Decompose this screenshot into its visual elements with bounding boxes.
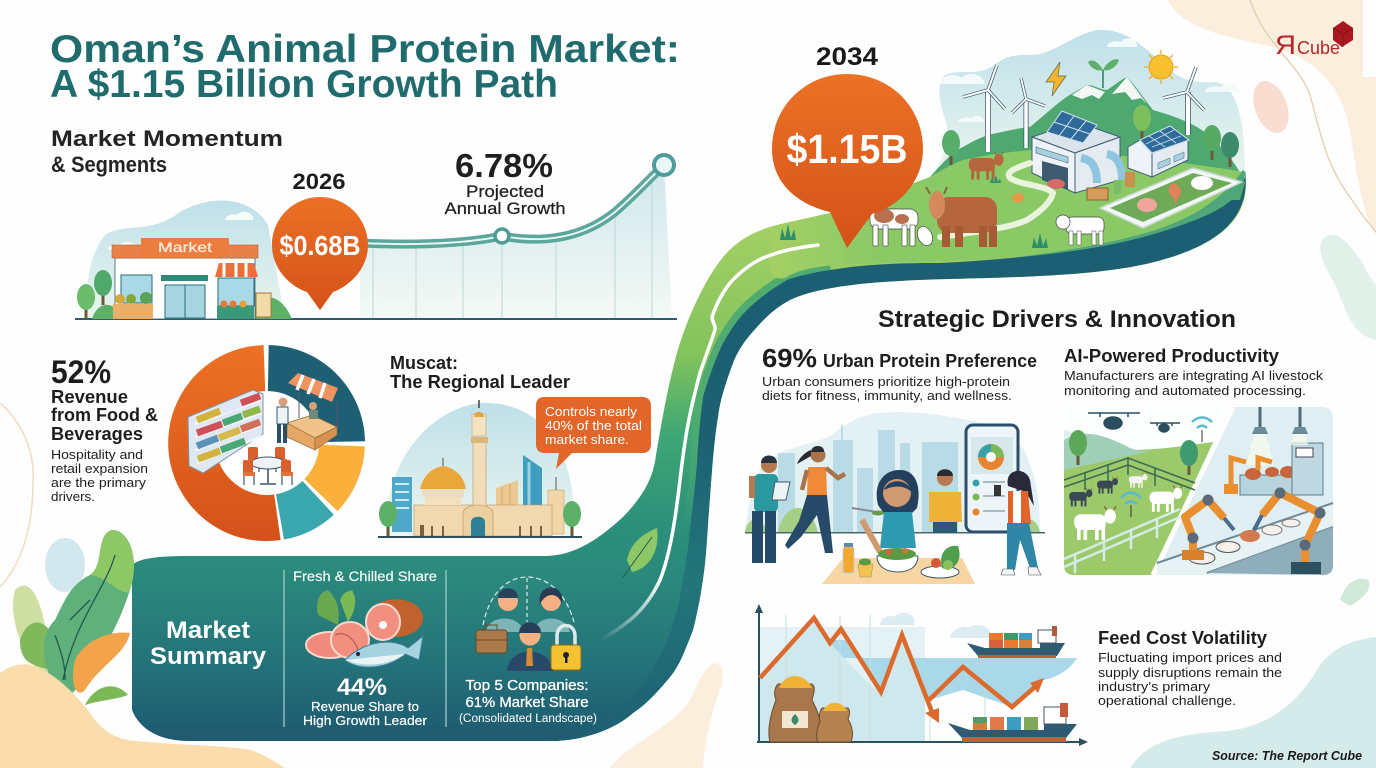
text: 52% revenue: Beverages bbox=[51, 424, 143, 444]
logo: RCube: Я bbox=[1275, 30, 1296, 60]
ribbon and summary panel shape bbox=[132, 175, 1246, 741]
blob: small green leaf right bbox=[1340, 579, 1369, 606]
factory bbox=[1240, 475, 1300, 495]
stat: projected growth: Annual Growth bbox=[444, 199, 566, 218]
wifi signal bbox=[1121, 418, 1212, 517]
sky bbox=[930, 30, 1245, 178]
ship top bbox=[967, 626, 1065, 658]
snow caps bbox=[1072, 77, 1147, 104]
juice bbox=[843, 543, 873, 577]
cow: brown bbox=[926, 187, 997, 247]
heading: muscat: Muscat: bbox=[390, 352, 458, 373]
illustration: ai livestock and automation bbox=[1064, 407, 1333, 575]
factory base bbox=[1064, 407, 1333, 575]
callout: muscat share: market share. bbox=[545, 433, 629, 447]
blob: bottom right teal bbox=[1130, 637, 1376, 768]
cow: spotted bbox=[870, 209, 936, 248]
heading: muscat: The Regional Leader bbox=[390, 371, 570, 392]
heading: market momentum: & Segments bbox=[51, 152, 167, 177]
icon: sun bbox=[1144, 50, 1178, 84]
house with solar bbox=[1128, 126, 1189, 177]
fresh chilled stat: High Growth Leader bbox=[303, 713, 428, 728]
text: ai productivity: Manufacturers are integrating AI livestock bbox=[1064, 368, 1324, 383]
fresh chilled stat: Revenue Share to bbox=[311, 699, 419, 714]
cow: white bbox=[1056, 215, 1104, 245]
ribbon: white stripe bbox=[600, 245, 818, 640]
clouds bbox=[108, 212, 253, 250]
icon: retail shelf bbox=[188, 390, 263, 473]
leaf on ribbon bbox=[623, 528, 658, 577]
title bbox=[50, 28, 680, 106]
turbine 2 bbox=[1012, 78, 1045, 148]
logo: RCube bbox=[1275, 21, 1353, 60]
city background bbox=[745, 412, 1040, 532]
blob: pink bbox=[1247, 76, 1295, 138]
chart: market growth 2026 bbox=[75, 155, 677, 320]
area bbox=[760, 627, 925, 742]
heading: muscat bbox=[390, 352, 570, 392]
fresh chilled heading: Fresh & Chilled Share bbox=[293, 569, 437, 584]
market sky blob bbox=[87, 201, 285, 319]
stat: projected growth: Projected bbox=[466, 182, 544, 201]
text: 52% revenue: from Food & bbox=[51, 405, 158, 425]
feed sacks bbox=[769, 676, 852, 742]
cow: small brown bbox=[969, 151, 1004, 180]
conveyor bbox=[1157, 503, 1333, 575]
person: standing man bbox=[929, 469, 962, 533]
phone bbox=[966, 425, 1018, 532]
text: urban protein: diets for fitness, immunity, and wellness. bbox=[762, 388, 1012, 403]
top companies text bbox=[459, 678, 597, 725]
pasture sky bbox=[1064, 407, 1233, 455]
label bbox=[150, 617, 267, 670]
drones bbox=[1088, 413, 1180, 432]
table bbox=[822, 558, 975, 584]
turbine 1 bbox=[963, 65, 1005, 152]
bubble: 2026 value: 2026 bbox=[292, 169, 346, 194]
pasture bbox=[1064, 436, 1213, 575]
icon: food stall bbox=[277, 373, 338, 450]
label: Summary bbox=[150, 643, 267, 670]
icon: market store bbox=[77, 238, 292, 319]
text: feed cost: operational challenge. bbox=[1098, 693, 1236, 708]
illustration: urban consumers bbox=[745, 412, 1045, 584]
cattle bbox=[1074, 506, 1116, 540]
blob line: left bbox=[0, 403, 33, 587]
axes bbox=[757, 610, 1084, 742]
text: urban protein: Urban consumers prioritize high-protein bbox=[762, 374, 1010, 389]
planter bbox=[1100, 168, 1242, 228]
icon: lightning bbox=[1046, 62, 1066, 96]
donut chart: revenue share bbox=[168, 345, 365, 541]
text: feed cost: Fluctuating import prices and bbox=[1098, 650, 1282, 665]
text: urban protein: Urban Protein Preference bbox=[823, 351, 1037, 371]
logo: RCube: Cube bbox=[1297, 38, 1340, 58]
blob: mint right bbox=[1320, 235, 1376, 340]
icon: meat and fish bbox=[306, 590, 423, 667]
person: woman with phone bbox=[994, 471, 1041, 575]
grass tufts bbox=[780, 175, 1048, 248]
lawn bbox=[769, 150, 1245, 278]
blob: top right peach bbox=[1168, 0, 1376, 235]
chart area bbox=[360, 165, 672, 319]
mountains and back hill bbox=[930, 77, 1245, 200]
clouds bbox=[880, 613, 991, 638]
stat: projected growth: 6.78% bbox=[455, 147, 553, 184]
callout: muscat share bbox=[536, 397, 651, 469]
icon: top companies bbox=[476, 577, 581, 671]
trees bbox=[942, 130, 960, 165]
icon: sprout bbox=[1088, 59, 1119, 88]
lawn shadow bbox=[1010, 170, 1245, 258]
text: feed cost bbox=[1098, 628, 1282, 708]
title: Oman’s Animal Protein Market: bbox=[50, 28, 680, 71]
illustration: feed cost chart bbox=[755, 604, 1088, 746]
text: feed cost: industry’s primary bbox=[1098, 679, 1211, 694]
salad bbox=[877, 546, 960, 578]
illustration: muscat skyline bbox=[378, 400, 582, 538]
clouds bbox=[940, 38, 1239, 122]
recovery line bbox=[929, 667, 1036, 707]
volatile price line bbox=[760, 618, 932, 712]
blob line: top right bbox=[1250, 0, 1376, 232]
ship bottom bbox=[948, 703, 1077, 742]
illustration: sustainable farm bbox=[769, 30, 1245, 278]
text: 52% revenue: drivers. bbox=[51, 489, 95, 504]
robotic arms bbox=[1185, 500, 1224, 553]
person: runner bbox=[785, 446, 845, 553]
top companies text: 61% Market Share bbox=[466, 695, 588, 711]
text: urban protein bbox=[762, 343, 1037, 403]
top companies text: Top 5 Companies: bbox=[466, 678, 588, 694]
callout: muscat share: 40% of the total bbox=[545, 419, 642, 433]
road bbox=[940, 163, 1053, 237]
text: ai productivity: AI-Powered Productivity bbox=[1064, 346, 1279, 366]
blob: top right corner strip bbox=[1363, 0, 1376, 77]
chicken bbox=[1012, 193, 1024, 203]
bushes bbox=[745, 508, 1040, 532]
heading: market momentum: Market Momentum bbox=[51, 126, 283, 151]
baseline bbox=[75, 318, 677, 320]
text: 52% revenue: 52% bbox=[51, 354, 111, 390]
bubble: 2034 value: 2034 bbox=[816, 43, 878, 71]
text: feed cost: Feed Cost Volatility bbox=[1098, 628, 1267, 648]
text: 52% revenue: are the primary bbox=[51, 475, 147, 490]
front fence bbox=[1064, 509, 1180, 573]
decoration: left foliage bbox=[13, 530, 134, 705]
back fence bbox=[1064, 457, 1195, 490]
ribbon: dark teal outer band bbox=[550, 170, 1246, 741]
text: ai productivity bbox=[1064, 346, 1324, 398]
stat: projected growth bbox=[444, 147, 566, 218]
bubble: 2034 value bbox=[772, 43, 923, 248]
turbine 3 bbox=[1163, 67, 1204, 135]
source: Source: The Report Cube bbox=[1212, 749, 1362, 763]
text: 52% revenue: Revenue bbox=[51, 387, 128, 407]
text: 52% revenue: Hospitality and bbox=[51, 447, 143, 462]
growth line bbox=[362, 165, 664, 244]
top companies text: (Consolidated Landscape) bbox=[459, 713, 597, 725]
person: woman eating bbox=[852, 470, 919, 552]
growth point bbox=[495, 229, 509, 243]
title: A $1.15 Billion Growth Path bbox=[50, 63, 558, 106]
farm building bbox=[1032, 111, 1135, 200]
fresh chilled stat bbox=[303, 674, 428, 728]
panel: market summary bbox=[150, 569, 597, 728]
blob: bottom left peach bbox=[0, 664, 285, 768]
text: feed cost: supply disruptions remain the bbox=[1098, 665, 1282, 680]
heading: strategic drivers: Strategic Drivers & Innovation bbox=[878, 306, 1236, 333]
text: urban protein: 69% bbox=[762, 343, 817, 373]
bubble: 2034 value: $1.15B bbox=[786, 126, 908, 172]
blob: bottom centre peach bbox=[610, 663, 723, 768]
sign text: Market bbox=[158, 239, 212, 255]
bubble: 2026 value: $0.68B bbox=[280, 230, 360, 261]
end point bbox=[654, 155, 674, 175]
water bbox=[760, 635, 1077, 707]
bubble: 2026 value bbox=[272, 169, 368, 310]
icon: table and chairs bbox=[243, 447, 293, 485]
text: ai productivity: monitoring and automated processing. bbox=[1064, 383, 1306, 398]
diagonal divider bbox=[1153, 407, 1233, 575]
heading: market momentum bbox=[51, 126, 283, 177]
fresh chilled stat: 44% bbox=[337, 674, 387, 701]
text: 52% revenue: retail expansion bbox=[51, 461, 148, 476]
hill bbox=[760, 618, 881, 742]
person: man with tablet bbox=[749, 456, 790, 563]
callout: muscat share: Controls nearly bbox=[545, 405, 638, 419]
text: 52% revenue bbox=[51, 354, 158, 504]
label: Market bbox=[166, 617, 250, 644]
ribbon: mid green strip bbox=[688, 266, 830, 530]
